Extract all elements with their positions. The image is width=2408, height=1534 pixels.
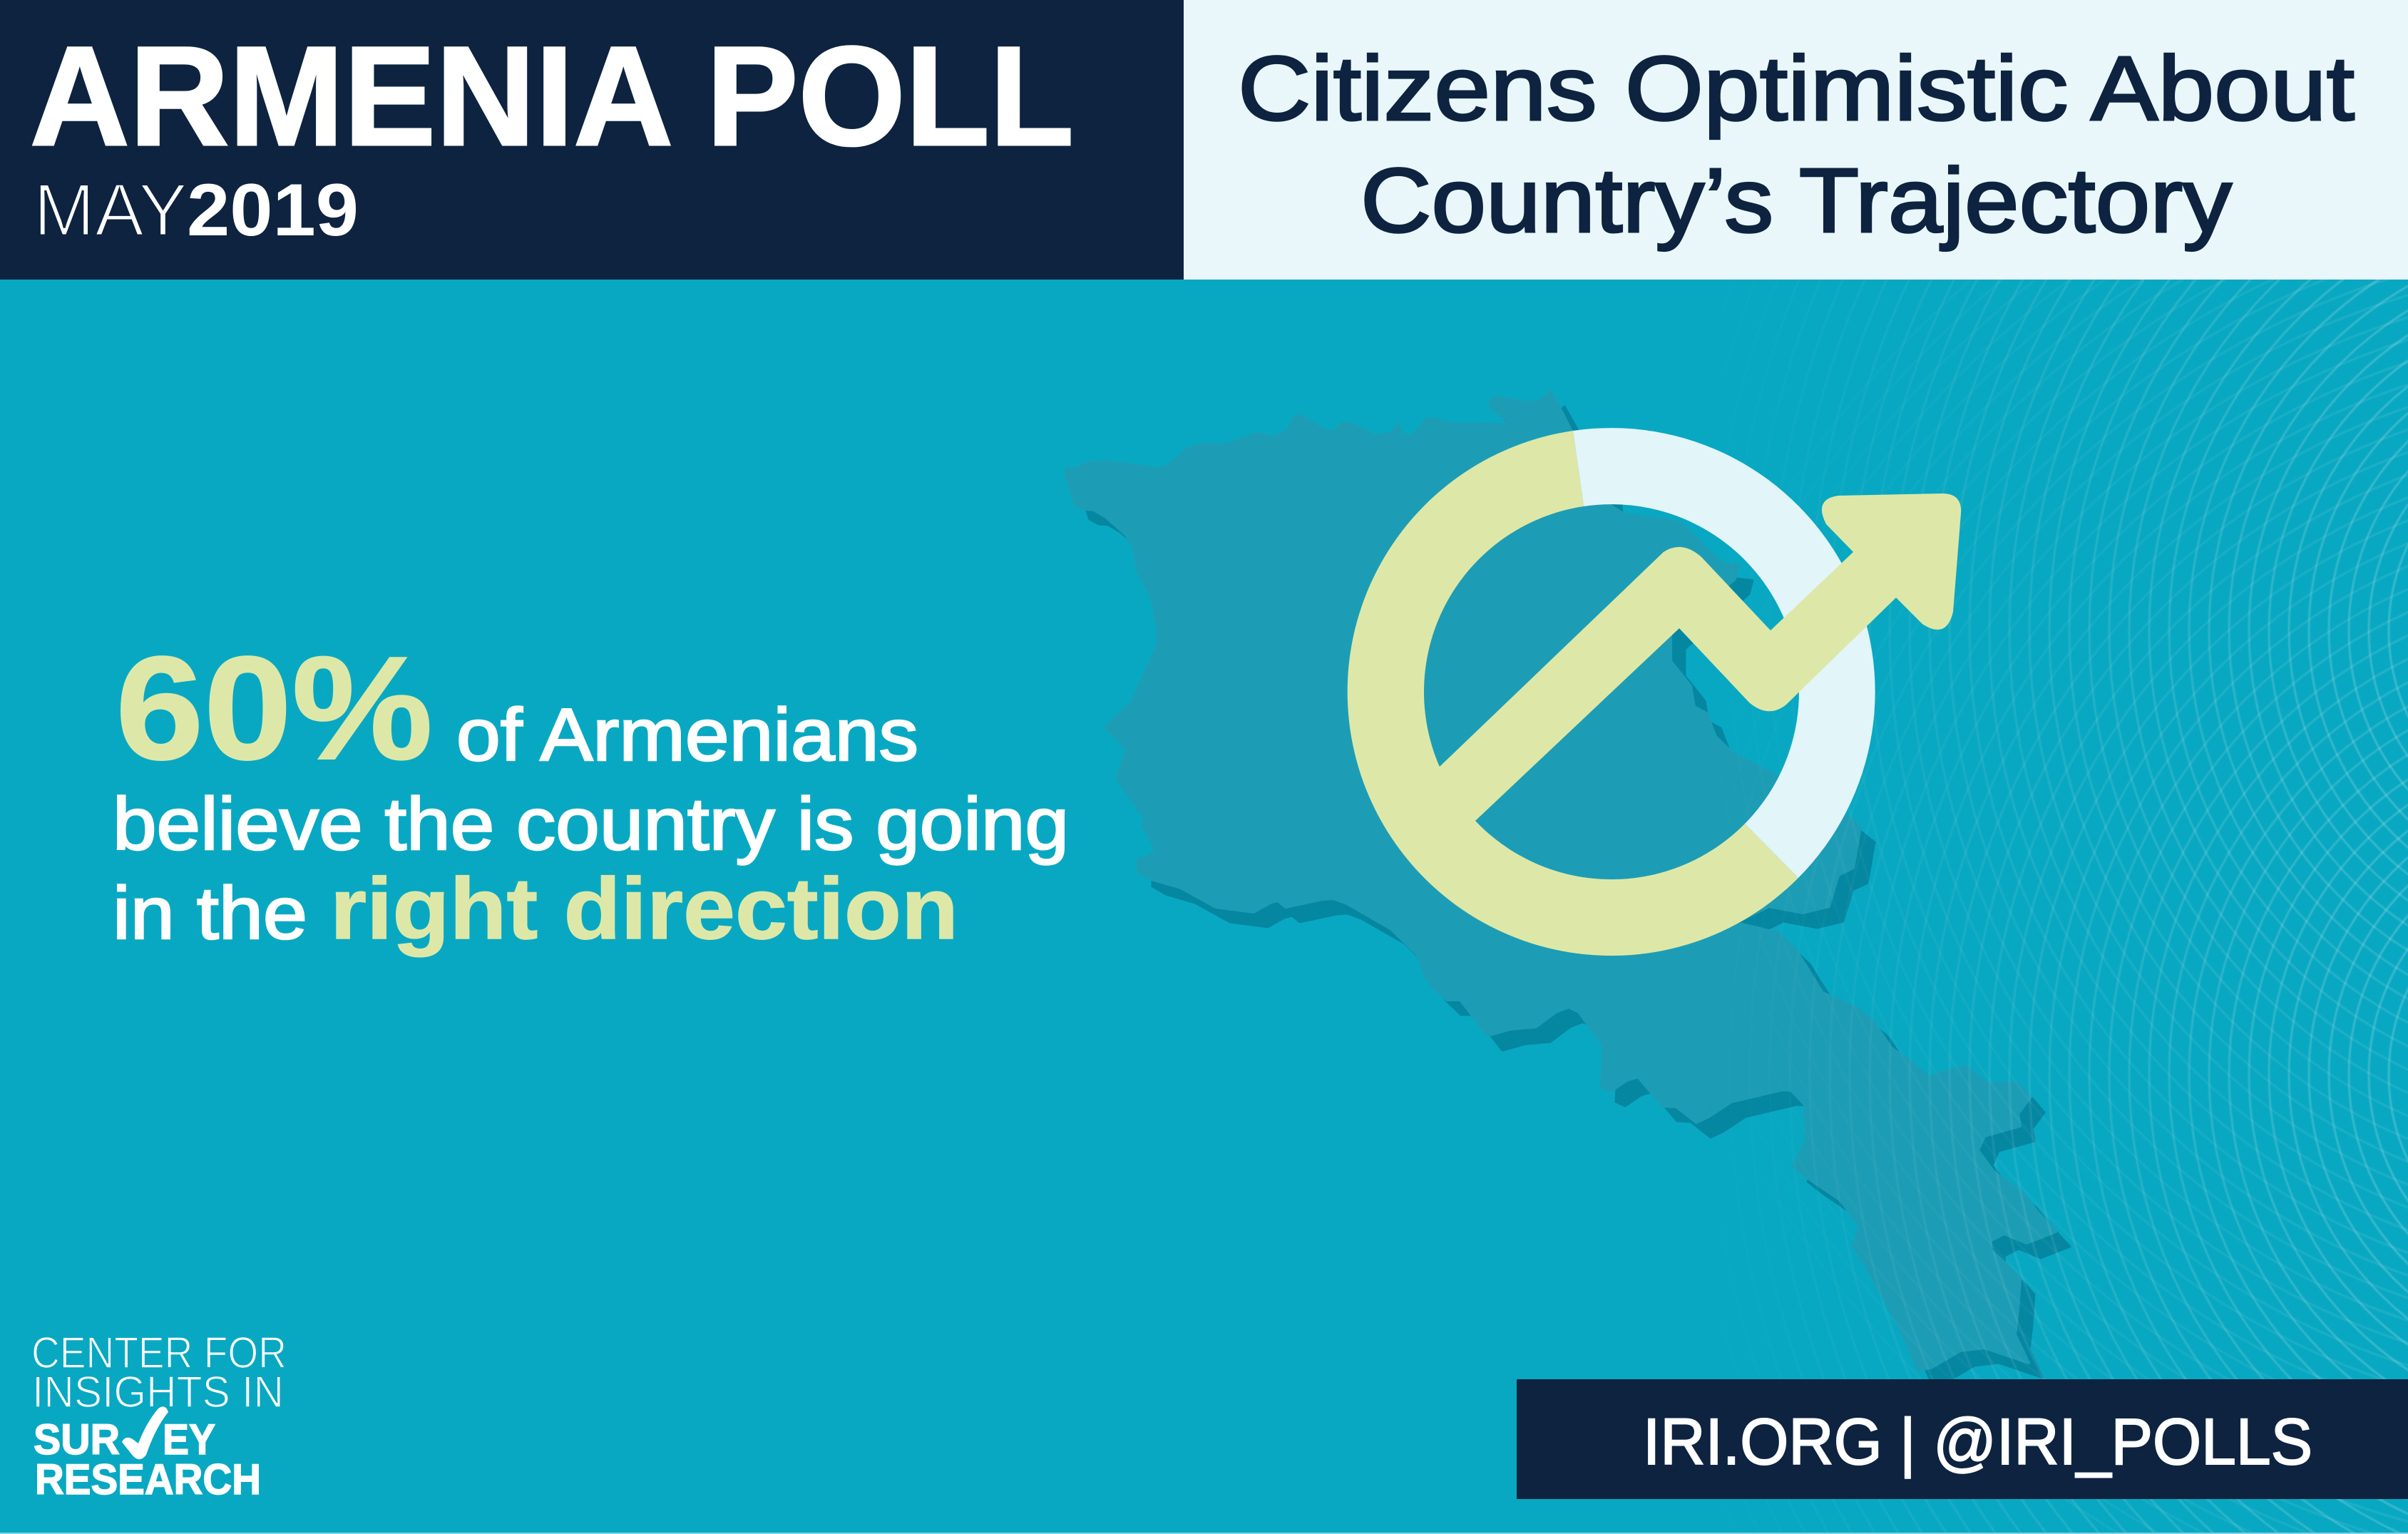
logo: Center for Insights in Survey Research: EY [163, 1416, 215, 1463]
headline: Country’s Trajectory [1361, 150, 2232, 252]
headline [1238, 38, 2355, 252]
date: MAY [34, 169, 188, 252]
60 percent figure: 60% [116, 626, 433, 790]
statement: in the [113, 872, 307, 955]
date: 2019 [187, 169, 359, 252]
header: right panel [1184, 0, 2408, 280]
logo: Center for Insights in Survey Research [31, 1329, 287, 1503]
statement [113, 694, 1069, 955]
donut chart: 60 percent [1348, 428, 1875, 956]
logo: Center for Insights in Survey Research: SUR [34, 1416, 120, 1463]
icon: rising zigzag arrow [1419, 494, 1961, 834]
icon: check mark [122, 1406, 168, 1459]
key statistic text [113, 626, 1069, 957]
date [34, 169, 359, 252]
statement: of Armenians [456, 694, 918, 777]
map of Armenia [1066, 392, 2070, 1385]
wave line pattern [1781, 280, 2408, 1533]
statement: believe the country is going [113, 783, 1069, 866]
headline: Citizens Optimistic About [1238, 38, 2355, 140]
website and handle: IRI.ORG | @IRI_POLLS [1643, 1406, 2312, 1478]
highlighted phrase: right direction [330, 860, 958, 957]
donut 60 percent segment [1348, 431, 1798, 956]
donut remainder segment [1573, 428, 1875, 878]
logo: Center for Insights in Survey Research: CENTER FOR [31, 1329, 287, 1378]
footer banner [1517, 1379, 2408, 1499]
logo: Center for Insights in Survey Research: RESEARCH [35, 1456, 261, 1503]
header: left panel [0, 0, 1184, 280]
title: ARMENIA POLL [30, 17, 1074, 175]
logo: Center for Insights in Survey Research: INSIGHTS IN [32, 1368, 284, 1417]
